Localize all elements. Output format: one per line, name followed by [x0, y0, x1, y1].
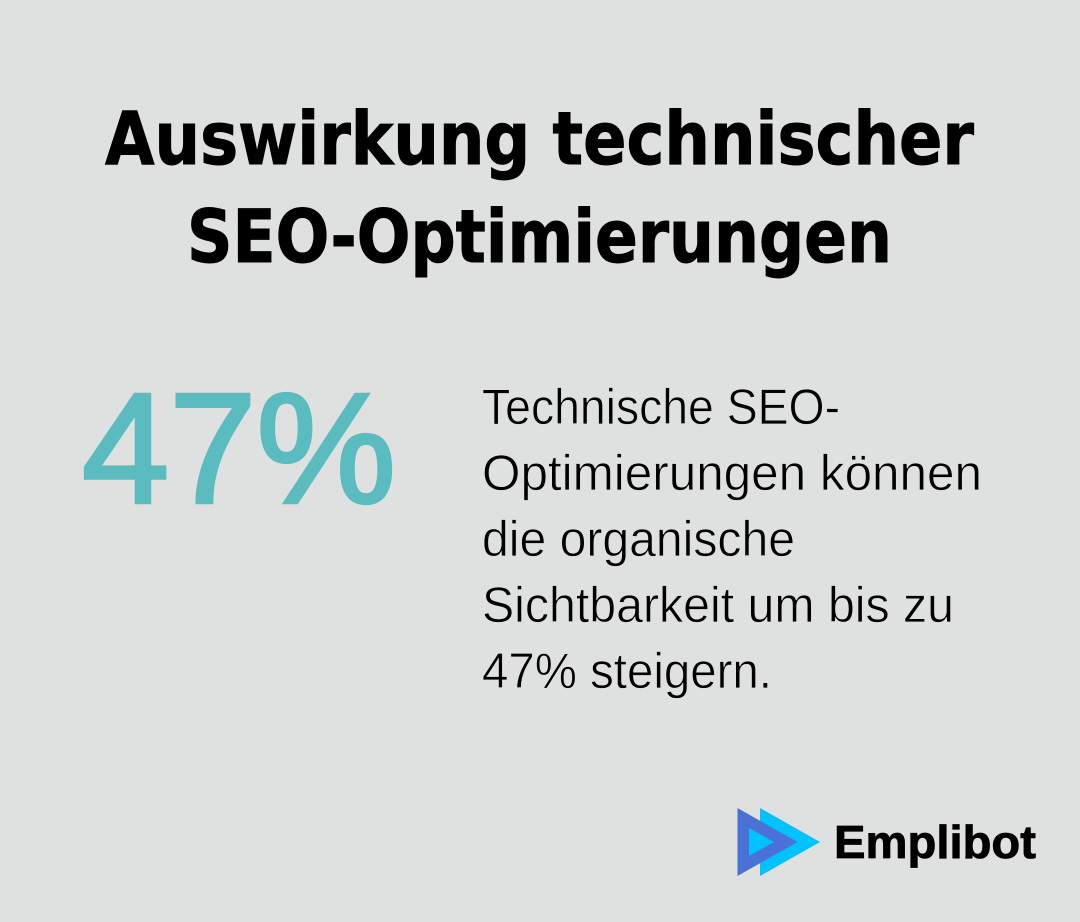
description text: Sichtbarkeit um bis zu — [482, 577, 954, 633]
title: Auswirkung technischer — [105, 97, 974, 182]
title — [105, 97, 974, 280]
description text: die organische — [482, 511, 795, 567]
logo wordmark: Emplibot — [834, 816, 1036, 868]
title: SEO-Optimierungen — [187, 195, 892, 280]
logo: Emplibot — [738, 808, 1036, 876]
icon: play triangles — [738, 808, 820, 876]
description text — [482, 379, 982, 699]
description text: 47% steigern. — [482, 643, 772, 699]
description text: Technische SEO- — [482, 379, 840, 435]
big stat: 47%: 47% — [82, 362, 396, 536]
description text: Optimierungen können — [482, 445, 982, 501]
